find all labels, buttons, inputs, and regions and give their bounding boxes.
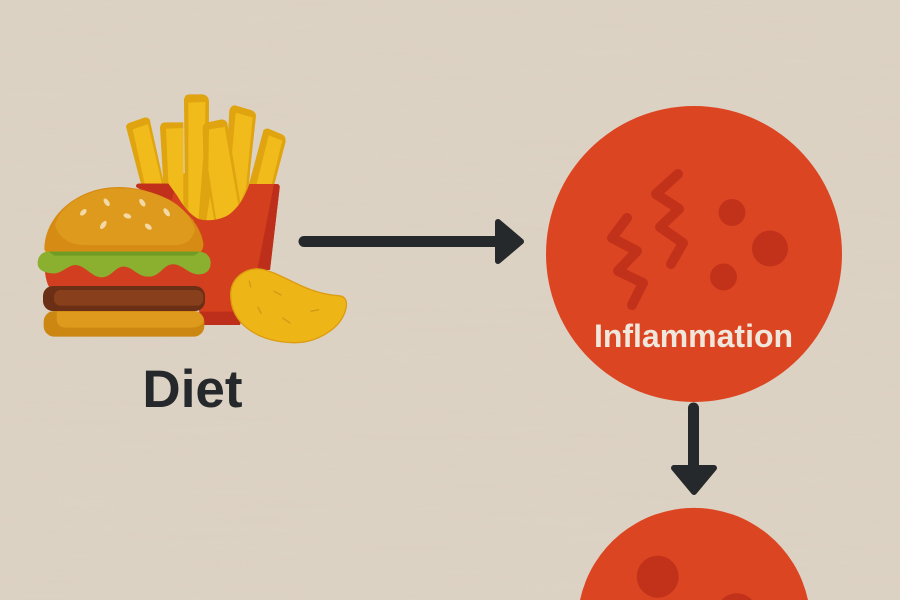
icon: potato chip xyxy=(231,269,346,343)
arrow: inflammation downward xyxy=(674,408,714,492)
icon: inflammation spots xyxy=(710,199,788,290)
icon: fast food group xyxy=(38,94,346,343)
sesame seeds xyxy=(79,197,171,231)
burger patty xyxy=(43,286,205,311)
icon: zigzag nerve marks xyxy=(612,174,683,305)
panel: inflammation circle xyxy=(546,106,842,402)
icon: lower spots xyxy=(637,556,752,600)
label: Inflammation: Inflammation xyxy=(594,318,793,354)
icon: french fries xyxy=(126,94,286,223)
burger bottom bun xyxy=(44,311,204,337)
burger tomato layer xyxy=(44,263,205,288)
burger lettuce xyxy=(38,252,211,277)
label: Diet: Diet xyxy=(142,360,243,419)
panel: lower circle xyxy=(580,508,808,600)
arrow: diet to inflammation xyxy=(304,222,521,261)
icon: burger xyxy=(38,187,211,337)
icon: fries carton xyxy=(136,184,280,325)
burger top bun xyxy=(44,187,203,253)
